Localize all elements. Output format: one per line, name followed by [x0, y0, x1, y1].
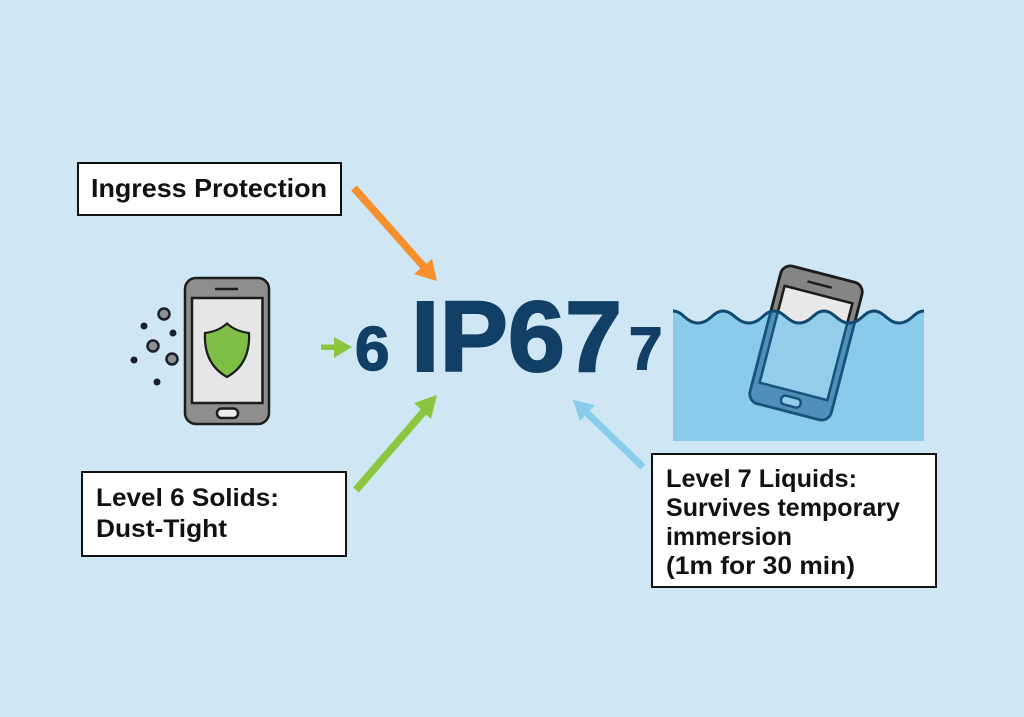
- label box: Level 7 Liquids: immersion: [666, 523, 792, 551]
- label box: Ingress Protection: Ingress Protection: [91, 173, 327, 203]
- label box: Level 7 Liquids: (1m for 30 min): [666, 552, 855, 580]
- label box: Level 7 Liquids: [652, 454, 936, 587]
- arrow: orange to IP67: [354, 188, 437, 281]
- digit 7: 7: [629, 315, 662, 382]
- arrow: blue to IP67: [573, 400, 643, 467]
- small arrow: green to 6: [321, 337, 352, 358]
- label box: Ingress Protection: [78, 163, 341, 215]
- icon: submerged phone: [748, 264, 864, 422]
- icon: dust particles: [130, 308, 178, 386]
- label box: Level 6 Solids: Dust-Tight: [96, 515, 228, 543]
- label box: Level 7 Liquids: Survives temporary: [666, 494, 900, 522]
- arrow: green to IP67: [356, 395, 437, 490]
- label box: Level 7 Liquids: Level 7 Liquids:: [666, 465, 857, 493]
- digit 6: 6: [355, 315, 389, 384]
- submerged part of phone: [748, 312, 856, 422]
- infographic canvas: [77, 162, 937, 588]
- water with waves: [673, 310, 924, 441]
- label box: Level 6 Solids: Level 6 Solids:: [96, 484, 279, 512]
- icon: phone with shield: [185, 278, 269, 424]
- heading: IP67: IP67: [411, 281, 622, 393]
- icon: green shield: [205, 324, 249, 377]
- label box: Level 6 Solids: [82, 472, 346, 556]
